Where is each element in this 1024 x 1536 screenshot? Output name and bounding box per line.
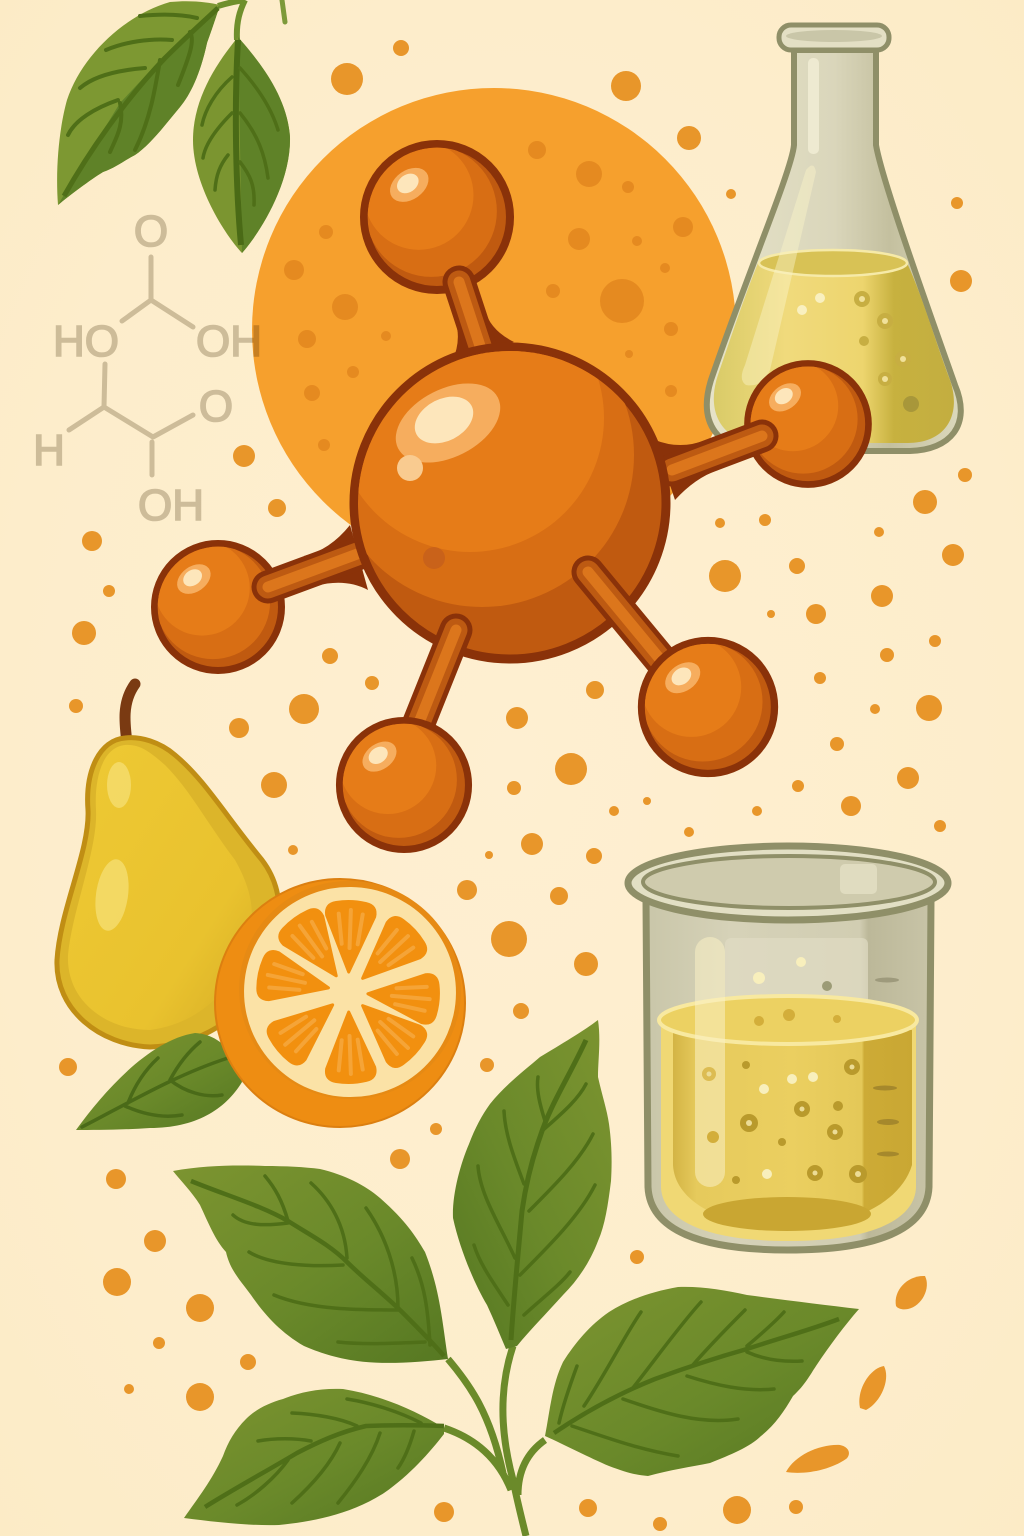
beaker liquid <box>661 1020 916 1241</box>
beaker <box>628 846 948 1250</box>
small leaf under orange <box>76 1033 242 1130</box>
beaker gradation marks <box>873 978 899 1156</box>
large orange circle <box>252 88 736 572</box>
circle spots <box>284 141 693 451</box>
flask bubbles <box>854 291 919 412</box>
chemical structure formula <box>33 207 262 530</box>
orange slice <box>215 860 481 1127</box>
flask lip <box>779 25 889 50</box>
lower branch stems <box>444 1346 545 1536</box>
leaf right <box>193 37 290 253</box>
upper molecule bonds <box>268 282 762 587</box>
lower left leaf <box>184 1389 444 1525</box>
right leaf <box>545 1287 859 1476</box>
left atom <box>154 540 282 670</box>
upper centre leaf <box>453 1020 612 1349</box>
flask liquid <box>714 263 954 443</box>
conical flask <box>707 25 961 451</box>
beaker bubbles <box>702 1009 867 1184</box>
bottom atom <box>340 717 468 850</box>
right atom <box>748 360 868 484</box>
top leaves <box>57 0 290 253</box>
chemical structure formula: O <box>134 207 168 256</box>
lower right atom <box>642 637 774 774</box>
chemical structure formula: H <box>33 426 65 475</box>
large left leaf <box>173 1166 448 1363</box>
orange segments <box>254 901 440 1083</box>
chemical structure formula: OH <box>196 317 262 366</box>
lower molecule bonds <box>418 572 664 725</box>
pear <box>57 684 279 1047</box>
leaf left <box>57 1 220 205</box>
beaker rim <box>628 846 948 920</box>
molecule <box>154 140 868 850</box>
chemical structure formula: OH <box>138 481 204 530</box>
chemical structure formula: HO <box>53 317 119 366</box>
chemical structure formula: O <box>199 382 233 431</box>
falling petals <box>786 1276 927 1473</box>
top atom <box>364 140 510 290</box>
bond flares <box>304 310 718 590</box>
central atom <box>350 342 670 664</box>
